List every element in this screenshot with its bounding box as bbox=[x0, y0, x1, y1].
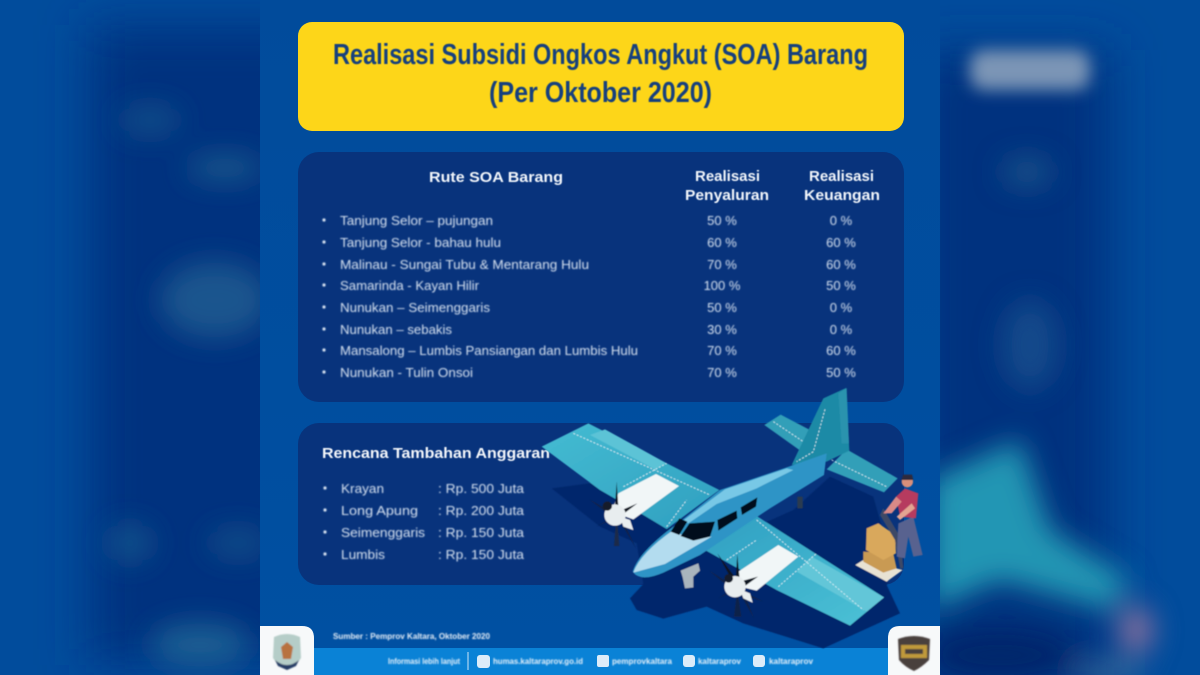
left propeller bbox=[589, 482, 637, 548]
budget rows: : Rp. 150 Juta bbox=[438, 525, 525, 540]
budget heading: Rencana Tambahan Anggaran bbox=[322, 446, 550, 462]
footer bar bbox=[260, 648, 940, 675]
table rows: Tanjung Selor - bahau hulu bbox=[340, 235, 501, 250]
table rows: Nunukan – Seimenggaris bbox=[340, 300, 491, 315]
table rows: 60 % bbox=[707, 235, 737, 250]
landing gear bbox=[681, 563, 700, 588]
blurred background: left side bbox=[80, 16, 260, 675]
budget rows bbox=[323, 481, 525, 562]
footer social links: kaltaraprov bbox=[698, 657, 742, 666]
budget rows: Lumbis bbox=[341, 547, 386, 562]
right wing bbox=[705, 516, 884, 626]
table rows: Malinau - Sungai Tubu & Mentarang Hulu bbox=[340, 257, 589, 272]
budget rows: : Rp. 200 Juta bbox=[438, 503, 525, 518]
table rows: 0 % bbox=[830, 213, 853, 228]
illustration: plane and cargo worker bbox=[542, 388, 923, 648]
footer social links: kaltaraprov bbox=[769, 657, 814, 666]
logo tab: right emblem bbox=[888, 626, 940, 675]
icon: twitter bbox=[683, 655, 695, 667]
budget rows: Krayan bbox=[341, 481, 384, 496]
source note: Sumber : Pemprov Kaltara, Oktober 2020 bbox=[333, 632, 491, 641]
table header: Realisasi bbox=[809, 169, 874, 185]
tail stabilisers bbox=[764, 415, 810, 454]
fuselage bbox=[633, 453, 827, 577]
panel: SOA route table bbox=[298, 152, 904, 402]
table rows: 0 % bbox=[830, 300, 853, 315]
right propeller bbox=[709, 553, 763, 618]
table rows: 50 % bbox=[707, 300, 737, 315]
footer social links: pemprovkaltara bbox=[612, 657, 673, 666]
nose highlight bbox=[633, 530, 712, 573]
table rows: 100 % bbox=[704, 278, 741, 293]
icon: instagram bbox=[753, 655, 765, 667]
logo tab: left provincial crest bbox=[260, 626, 314, 675]
table header: Penyaluran bbox=[685, 188, 769, 204]
footer social links: humas.kaltaraprov.go.id bbox=[493, 657, 583, 666]
table rows: Nunukan – sebakis bbox=[340, 322, 452, 337]
left wing bbox=[542, 423, 719, 529]
budget rows: Long Apung bbox=[341, 503, 418, 518]
plane ground shadow bbox=[552, 477, 900, 648]
table rows: Nunukan - Tulin Onsoi bbox=[340, 365, 473, 380]
table rows: Mansalong – Lumbis Pansiangan dan Lumbis Hulu bbox=[340, 343, 638, 358]
fuselage top highlight bbox=[684, 468, 793, 523]
icon: website bbox=[477, 655, 490, 668]
title banner: (Per Oktober 2020) bbox=[489, 77, 712, 109]
footer social links bbox=[388, 652, 814, 670]
table rows: Tanjung Selor – pujungan bbox=[340, 213, 493, 228]
table rows: 60 % bbox=[826, 343, 856, 358]
table rows: 30 % bbox=[707, 322, 737, 337]
icon: facebook bbox=[597, 655, 609, 667]
table rows: 60 % bbox=[826, 235, 856, 250]
table rows: 50 % bbox=[707, 213, 737, 228]
table rows: 0 % bbox=[830, 322, 853, 337]
blurred background: right side bbox=[940, 38, 1172, 675]
table rows: 70 % bbox=[707, 343, 737, 358]
table rows: 50 % bbox=[826, 365, 856, 380]
white engine nacelle right bbox=[733, 545, 798, 591]
budget rows: Seimenggaris bbox=[341, 525, 426, 540]
table header: Realisasi bbox=[695, 169, 760, 185]
cockpit and cabin windows bbox=[671, 518, 687, 535]
table header bbox=[429, 169, 880, 204]
budget rows: : Rp. 150 Juta bbox=[438, 547, 525, 562]
table rows: 70 % bbox=[707, 257, 737, 272]
panel: additional budget plan bbox=[298, 423, 904, 585]
table rows: Samarinda - Kayan Hilir bbox=[340, 278, 480, 293]
budget rows: : Rp. 500 Juta bbox=[438, 481, 525, 496]
table rows: 60 % bbox=[826, 257, 856, 272]
cargo worker bbox=[855, 475, 923, 582]
table rows: 70 % bbox=[707, 365, 737, 380]
table rows bbox=[322, 213, 856, 380]
poster background bbox=[260, 0, 940, 675]
table rows: 50 % bbox=[826, 278, 856, 293]
title banner bbox=[298, 22, 904, 131]
footer social links: Informasi lebih lanjut bbox=[388, 657, 460, 666]
table header: Keuangan bbox=[804, 188, 880, 204]
table header: Rute SOA Barang bbox=[429, 170, 563, 186]
tail fin bbox=[792, 388, 849, 465]
white engine nacelle left bbox=[612, 474, 679, 519]
title banner: Realisasi Subsidi Ongkos Angkut (SOA) Barang bbox=[333, 39, 868, 71]
